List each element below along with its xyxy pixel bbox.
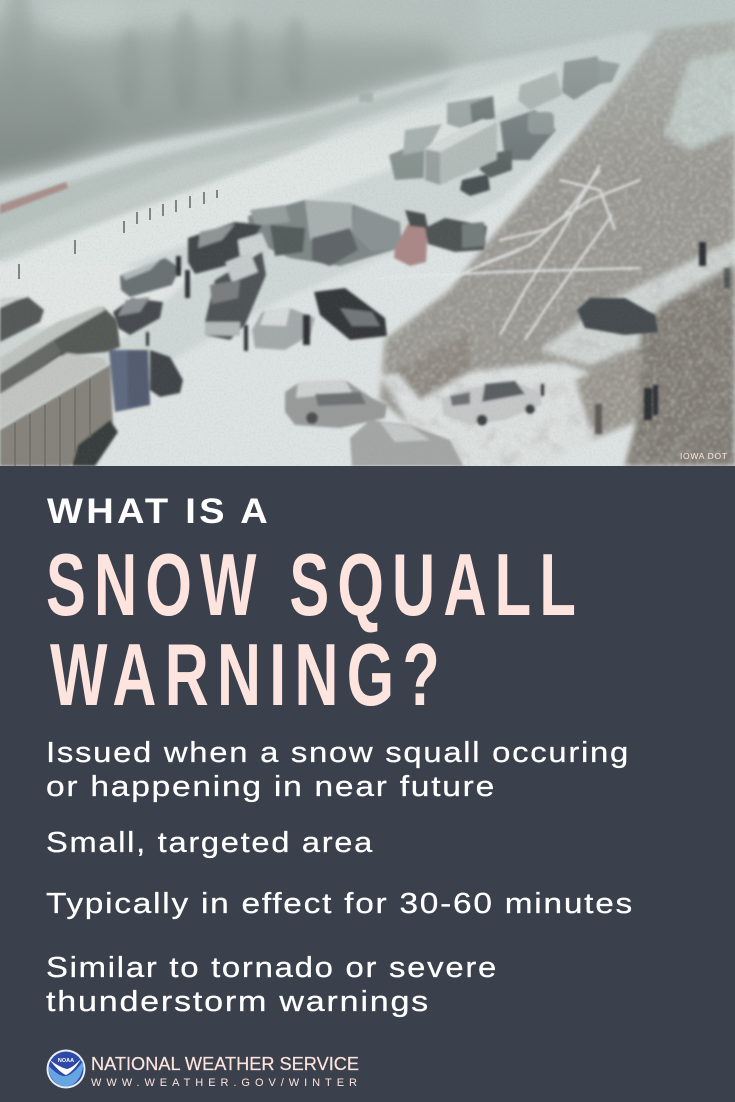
central wreck cluster [188, 200, 487, 274]
icon: NOAA logo: NOAA [58, 1058, 74, 1064]
photo: multi-vehicle pileup on a snowy highway [0, 0, 735, 466]
title: Snow Squall Warning? [46, 535, 584, 724]
icon: NOAA logo [46, 1050, 86, 1088]
bullet text: comparison: Similar to tornado or severe [46, 952, 498, 984]
bullet text: when it is issued [46, 737, 630, 803]
tire tracks in the median [455, 164, 641, 342]
bullet text: comparison: thunderstorm warnings [46, 986, 430, 1018]
heading: What is a: WHAT IS A [47, 492, 271, 531]
grassy median [380, 20, 735, 466]
snow and grass texture in median [380, 20, 735, 466]
distant trucks and cars up the road [359, 56, 620, 180]
bullet text: duration: Typically in effect for 30-60 minutes [46, 888, 634, 920]
snowfall grain [0, 86, 655, 466]
footer: website: WWW.WEATHER.GOV/WINTER [91, 1077, 357, 1089]
pileup vehicles in foreground [113, 252, 658, 466]
fence posts [19, 190, 217, 279]
white semi truck [425, 119, 497, 196]
people standing near the wreck [146, 242, 730, 434]
bullet text: comparison [46, 952, 498, 1018]
footer: National Weather Service: NATIONAL WEATHER SERVICE [91, 1053, 359, 1074]
fog overlay on upper part of the photo [0, 0, 735, 140]
far barrier [0, 182, 68, 214]
tractor trailers on the left [0, 296, 183, 466]
bullet text: when it is issued: or happening in near future [46, 771, 496, 803]
bullet text: when it is issued: Issued when a snow squall occuring [46, 737, 630, 769]
distant tree line and fog [0, 0, 735, 190]
road surface [0, 30, 660, 466]
trailer side ribs [15, 379, 90, 466]
title: Snow Squall Warning?: WARNING? [50, 625, 448, 724]
photo credit: IOWA DOT [680, 451, 727, 461]
bullet text: area: Small, targeted area [46, 827, 374, 859]
bare trees at upper left [6, 0, 304, 94]
